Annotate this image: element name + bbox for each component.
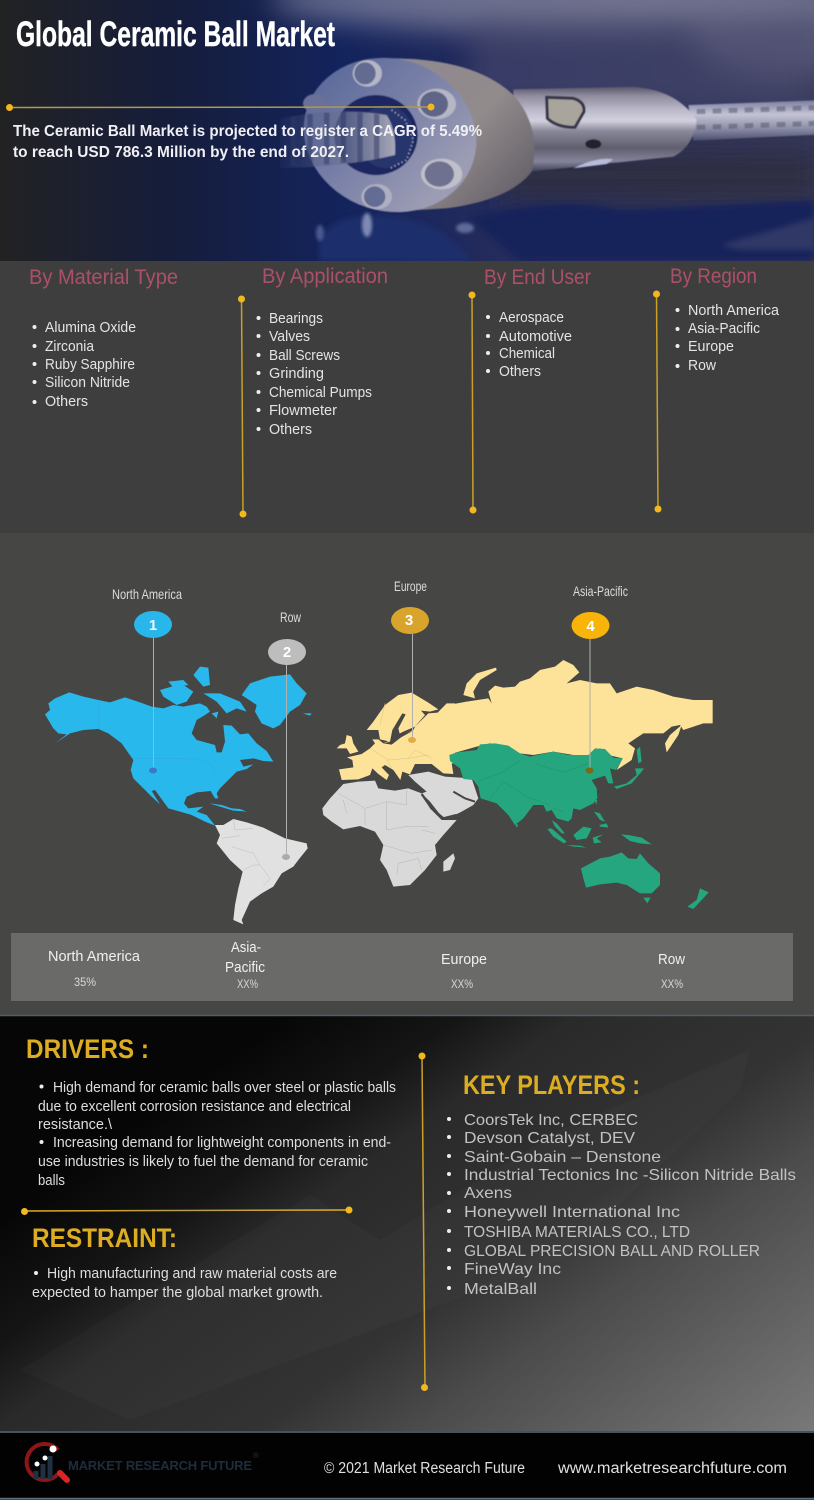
share: row: XX% (661, 977, 683, 991)
column: by end user (468, 266, 591, 514)
restraint text: expected to hamper the global market growth. (32, 1285, 323, 1301)
region list: Europe (688, 338, 734, 355)
market summary text: to reach USD 786.3 Million by the end of 2027. (13, 144, 349, 161)
end user list: Automotive (499, 328, 572, 345)
drivers block (26, 1034, 396, 1189)
share: north america (48, 948, 141, 989)
pin: north america (112, 586, 182, 774)
share: asia-pacific (225, 939, 265, 991)
region list: North America (688, 302, 780, 319)
panel: segmentation (0, 261, 814, 533)
end user divider (468, 292, 476, 514)
flange bolt holes (303, 60, 462, 209)
share: europe (441, 951, 487, 991)
region list (676, 302, 780, 374)
key players list: Saint-Gobain – Denstone (464, 1149, 661, 1166)
panel: drivers restraint key players (0, 1015, 814, 1432)
end user list: Chemical (499, 345, 555, 362)
share: row (658, 951, 685, 991)
column: by material type (29, 266, 178, 410)
key players list: TOSHIBA MATERIALS CO., LTD (464, 1224, 690, 1241)
logo wordmark: MARKET RESEARCH FUTURE (68, 1458, 252, 1473)
application list: Bearings (269, 310, 323, 327)
copyright: © 2021 Market Research Future (324, 1460, 525, 1477)
panel: world map (0, 533, 814, 1016)
ball screw photo (270, 0, 814, 261)
key players list: CoorsTek Inc, CERBEC (464, 1112, 638, 1129)
website: www.marketresearchfuture.com (557, 1460, 787, 1477)
world map (45, 660, 713, 924)
application list: Valves (269, 328, 310, 345)
key players block (447, 1070, 796, 1298)
heading: by material type: By Material Type (29, 266, 178, 289)
share: europe: Europe (441, 951, 487, 968)
material list: Others (45, 393, 88, 410)
key players heading: KEY PLAYERS : (463, 1070, 640, 1100)
material list: Silicon Nitride (45, 374, 130, 391)
header divider (6, 104, 434, 111)
region: rest of world south america (215, 819, 308, 924)
header banner (0, 0, 814, 261)
vertical divider (418, 1052, 428, 1391)
material list: Zirconia (45, 338, 95, 355)
application list: Grinding (269, 365, 324, 382)
drivers text: High demand for ceramic balls over steel or plastic balls (53, 1080, 396, 1096)
application list: Others (269, 421, 312, 438)
regional share table (11, 933, 793, 1001)
region divider (653, 290, 662, 512)
region: europe and russia (337, 660, 713, 780)
heading: by end user: By End User (484, 266, 591, 289)
share: asia-pacific: Pacific (225, 959, 265, 976)
heading: by region: By Region (670, 265, 757, 288)
pin: north america: North America (112, 586, 182, 602)
application list: Ball Screws (269, 347, 340, 364)
logo (27, 1444, 67, 1480)
drivers text: balls (38, 1173, 65, 1189)
region: rest of world africa and middle east (322, 772, 478, 887)
share: asia-pacific: XX% (237, 977, 258, 991)
pin: asia-pacific: 4 (586, 618, 595, 635)
region: north america (45, 667, 312, 826)
drivers text: resistance.\ (38, 1117, 113, 1133)
heading: by application: By Application (262, 265, 388, 288)
title: Global Ceramic Ball Market (16, 15, 335, 54)
key players list: GLOBAL PRECISION BALL AND ROLLER (464, 1243, 760, 1260)
market summary text: The Ceramic Ball Market is projected to register a CAGR of 5.49% (13, 123, 482, 140)
footer (0, 1431, 814, 1499)
drivers text (38, 1080, 396, 1189)
share: asia-pacific: Asia- (231, 939, 261, 956)
pin: row (268, 609, 306, 860)
registered mark: ® (253, 1451, 259, 1460)
pin: north america: 1 (149, 617, 157, 634)
restraint block (32, 1223, 337, 1301)
end user list: Others (499, 363, 541, 380)
pin: asia-pacific (572, 583, 628, 774)
key players list: Axens (464, 1185, 512, 1202)
restraint text: High manufacturing and raw material costs are (47, 1266, 337, 1282)
key players list: Devson Catalyst, DEV (464, 1130, 635, 1147)
pin: europe (391, 578, 429, 743)
market summary text (13, 123, 482, 161)
horizontal divider (21, 1206, 352, 1215)
material list (32, 319, 136, 410)
share: row: Row (658, 951, 685, 968)
drivers text: use industries is likely to fuel the demand for ceramic (38, 1154, 368, 1170)
region list: Row (688, 357, 716, 374)
drivers text: Increasing demand for lightweight components in end- (53, 1135, 391, 1151)
column: by application (238, 265, 388, 518)
application list: Flowmeter (269, 402, 337, 419)
key players list (447, 1112, 796, 1298)
column: by region (653, 265, 780, 512)
drivers heading: DRIVERS : (26, 1034, 149, 1064)
share: north america: 35% (74, 975, 96, 989)
region list: Asia-Pacific (688, 320, 760, 337)
pin: europe: Europe (394, 578, 427, 594)
material list: Alumina Oxide (45, 319, 136, 336)
restraint heading: RESTRAINT: (32, 1223, 177, 1253)
end user list (486, 309, 572, 380)
end user list: Aerospace (499, 309, 564, 326)
application list: Chemical Pumps (269, 384, 372, 401)
pin: asia-pacific: Asia-Pacific (573, 583, 628, 599)
restraint text (32, 1266, 337, 1301)
key players list: MetalBall (464, 1281, 537, 1298)
application divider (238, 296, 246, 518)
share: europe: XX% (451, 977, 473, 991)
pin: europe: 3 (405, 612, 413, 629)
pin: row: 2 (283, 644, 291, 661)
key players list: Industrial Tectonics Inc -Silicon Nitride Balls (464, 1167, 796, 1184)
region: asia pacific (449, 743, 709, 909)
key players list: FineWay Inc (464, 1261, 561, 1278)
material list: Ruby Sapphire (45, 356, 135, 373)
drivers text: due to excellent corrosion resistance and electrical (38, 1099, 351, 1115)
pin: row: Row (280, 609, 302, 625)
application list (256, 310, 372, 438)
key players list: Honeywell International Inc (464, 1204, 680, 1221)
share: north america: North America (48, 948, 141, 965)
